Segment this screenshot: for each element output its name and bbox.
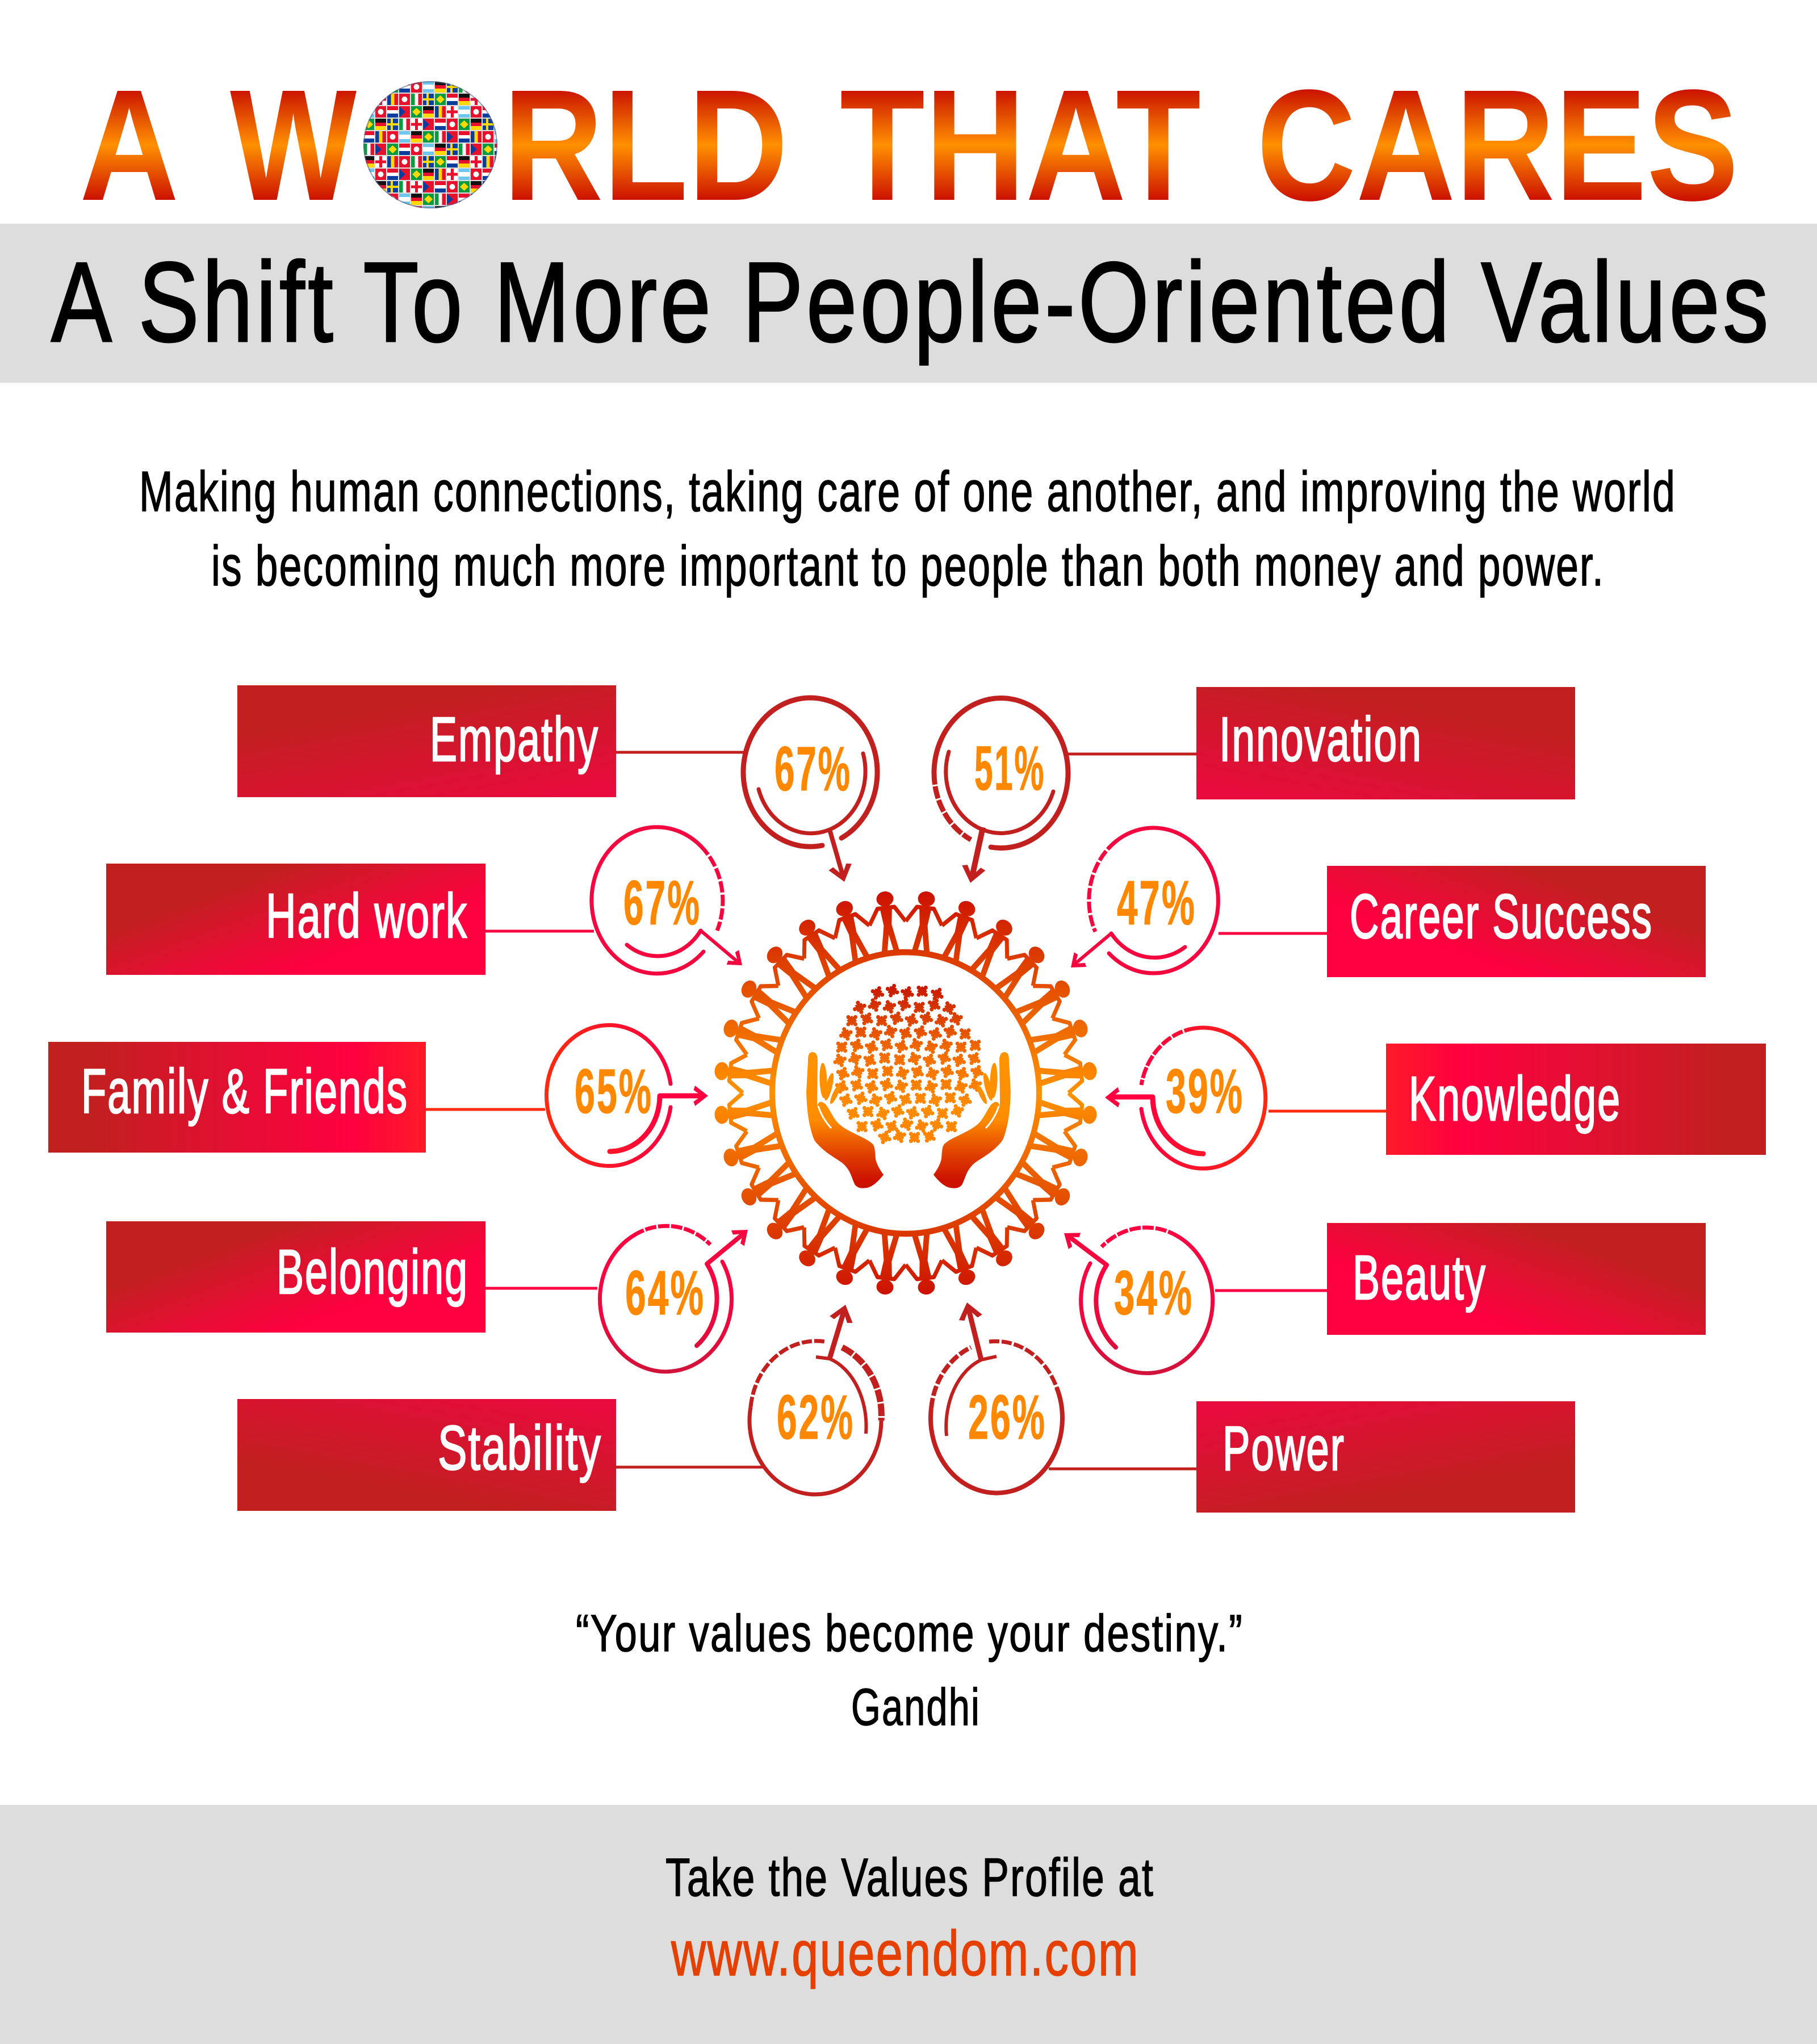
connector lines — [426, 752, 1386, 1469]
label: Belonging — [106, 1221, 485, 1333]
footer band: Take the Values Profile at — [665, 1848, 1154, 1908]
title: A — [79, 57, 179, 234]
intro text — [139, 460, 1676, 598]
label: Power: Power — [1223, 1414, 1345, 1484]
callout: Hard work 67%: 67% — [623, 868, 701, 938]
label: Career Success — [1327, 866, 1706, 977]
label: Innovation: Innovation — [1219, 705, 1422, 774]
callout: Family & Friends 65% — [547, 1025, 708, 1166]
footer band — [0, 1805, 1817, 2044]
label: Empathy: Empathy — [430, 705, 599, 774]
callout: Career Success 47% — [1065, 828, 1218, 975]
label: Power — [1196, 1401, 1575, 1513]
label: Family & Friends: Family & Friends — [81, 1057, 408, 1126]
quote: “Your values become your destiny.” — [576, 1605, 1244, 1662]
label: Stability — [237, 1399, 616, 1511]
callout: Career Success 47%: 47% — [1117, 868, 1196, 938]
callout: Power 26% — [931, 1300, 1062, 1493]
label: Hard work: Hard work — [266, 881, 468, 951]
callout: Beauty 34% — [1058, 1225, 1213, 1373]
callout: Stability 62% — [750, 1301, 881, 1494]
callout: Belonging 64% — [600, 1222, 754, 1372]
title: CARES — [1257, 57, 1739, 234]
label: Belonging: Belonging — [277, 1237, 468, 1307]
label: Beauty — [1327, 1223, 1706, 1335]
callout: Stability 62%: 62% — [777, 1383, 855, 1452]
title: W — [230, 57, 358, 234]
callout: Beauty 34%: 34% — [1114, 1258, 1194, 1328]
label: Stability: Stability — [438, 1413, 602, 1483]
label: Knowledge — [1386, 1044, 1766, 1155]
footer band: www.queendom.com — [671, 1918, 1140, 1989]
label: Career Success: Career Success — [1350, 882, 1653, 952]
icon: flag globe — [363, 81, 497, 208]
label: Beauty: Beauty — [1353, 1243, 1487, 1313]
icon: puzzle-piece sphere — [834, 983, 983, 1145]
title: THAT — [840, 57, 1201, 234]
callout: Knowledge 39%: 39% — [1166, 1057, 1244, 1126]
label: Family & Friends — [48, 1042, 426, 1153]
icon: right hand — [933, 1052, 1011, 1188]
callout: Hard work 67% — [592, 827, 748, 974]
label: Knowledge: Knowledge — [1409, 1064, 1621, 1134]
label: Hard work — [106, 864, 485, 975]
callout: Family & Friends 65%: 65% — [575, 1057, 653, 1126]
label: Innovation — [1196, 687, 1575, 799]
callout: Belonging 64%: 64% — [625, 1258, 705, 1328]
callout: Knowledge 39% — [1105, 1028, 1266, 1168]
title — [79, 57, 1739, 234]
callout: Innovation 51% — [934, 698, 1068, 886]
icon: ring of people holding hands — [714, 891, 1097, 1295]
callout: Empathy 67%: 67% — [774, 734, 852, 804]
title: RLD — [503, 57, 788, 234]
icon: left hand — [806, 1052, 884, 1188]
callout: Innovation 51%: 51% — [974, 734, 1045, 803]
callout: Empathy 67% — [743, 698, 877, 885]
quote — [576, 1605, 1244, 1736]
quote: Gandhi — [851, 1678, 981, 1736]
label: Empathy — [237, 685, 616, 797]
callout: Power 26%: 26% — [968, 1383, 1046, 1452]
